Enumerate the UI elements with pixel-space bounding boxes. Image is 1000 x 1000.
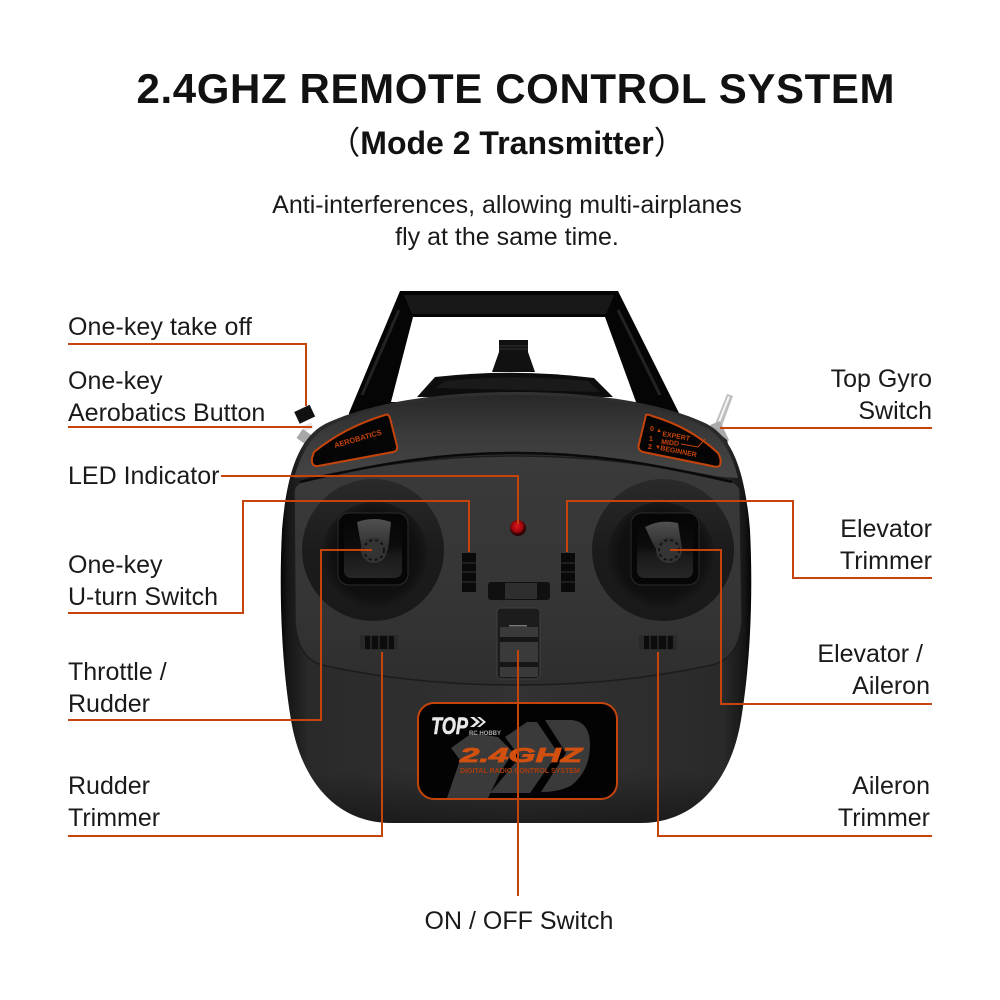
- callout: aileron trimmer: [658, 652, 932, 836]
- transmitter illustration: [281, 291, 751, 823]
- mode label plate: ▲: [656, 428, 662, 434]
- callout: aerobatics button: Aerobatics Button: [68, 399, 265, 427]
- handle: [349, 291, 679, 420]
- badge tagline: DIGITAL RADIO CONTROL SYSTEM: [460, 768, 580, 775]
- aerobatics label plate: AEROBATICS: [333, 428, 383, 450]
- callout: top gyro switch: Switch: [858, 397, 932, 425]
- callout: top gyro switch: [720, 365, 932, 428]
- callout: u-turn switch: U-turn Switch: [68, 583, 218, 611]
- callout: LED indicator: [68, 462, 518, 524]
- callout: elevator / aileron: [670, 550, 932, 704]
- mode label plate: EXPERT: [662, 431, 691, 443]
- callout: elevator trimmer: Trimmer: [840, 547, 932, 575]
- panel seam: [300, 453, 732, 482]
- mode label plate: [638, 415, 721, 467]
- callout: aileron trimmer: Aileron: [852, 772, 930, 800]
- callout: u-turn switch: [68, 501, 469, 613]
- callout: elevator / aileron: Aileron: [852, 672, 930, 700]
- mode label plate: MIDD: [661, 439, 679, 448]
- power switch: [497, 608, 540, 679]
- mode label plate: 1: [649, 436, 653, 443]
- mode label plate: 2: [648, 444, 652, 451]
- brand logo: [431, 713, 501, 740]
- description: fly at the same time.: [395, 223, 619, 251]
- brand logo: TOP: [431, 713, 469, 740]
- brand logo: RC HOBBY: [469, 731, 501, 737]
- callout: one-key take off: One-key take off: [68, 313, 252, 341]
- left stick well: [302, 479, 444, 621]
- callout: throttle / rudder: Rudder: [68, 690, 150, 718]
- callout: elevator / aileron: Elevator /: [817, 640, 923, 668]
- callout: u-turn switch: One-key: [68, 551, 163, 579]
- LED indicator light: [510, 520, 526, 536]
- lower face: [294, 456, 742, 685]
- body shell: [281, 392, 751, 823]
- callout: rudder trimmer: Rudder: [68, 772, 150, 800]
- callout: LED indicator: LED Indicator: [68, 462, 219, 490]
- upper face: [294, 395, 738, 478]
- mode label plate: 0: [650, 426, 654, 433]
- description: [272, 191, 742, 251]
- badge wordmark: 2.4GHZ: [458, 745, 583, 767]
- badge arrow graphic: [447, 720, 590, 798]
- mode label plate: BEGINNER: [660, 445, 697, 459]
- callout: aerobatics button: [68, 367, 312, 427]
- description: Anti-interferences, allowing multi-airplanes: [272, 191, 742, 219]
- callout: throttle / rudder: [68, 550, 372, 720]
- callout: rudder trimmer: Trimmer: [68, 804, 160, 832]
- aerobatics label plate: [312, 414, 397, 466]
- centre slider: [488, 582, 550, 600]
- right toggle switch: [710, 394, 733, 444]
- title: 2.4GHZ REMOTE CONTROL SYSTEM: [136, 65, 894, 112]
- callout: elevator trimmer: Elevator: [840, 515, 932, 543]
- callout: aerobatics button: One-key: [68, 367, 163, 395]
- callout: on/off switch: ON / OFF Switch: [425, 907, 613, 935]
- vertical trims: [462, 553, 575, 592]
- brand badge: [418, 703, 617, 799]
- top antenna knob: [417, 340, 613, 397]
- subtitle: （Mode 2 Transmitter）: [328, 125, 686, 161]
- callout: aileron trimmer: Trimmer: [838, 804, 930, 832]
- right stick well: [592, 479, 734, 621]
- callout: elevator trimmer: [567, 501, 932, 578]
- mode label plate: ▼: [655, 445, 661, 451]
- left push button: [294, 405, 315, 444]
- callout: throttle / rudder: Throttle /: [68, 658, 167, 686]
- callout: rudder trimmer: [68, 652, 382, 836]
- callout: top gyro switch: Top Gyro: [831, 365, 932, 393]
- callout: one-key take off: [68, 313, 306, 406]
- horizontal trims: [360, 635, 677, 650]
